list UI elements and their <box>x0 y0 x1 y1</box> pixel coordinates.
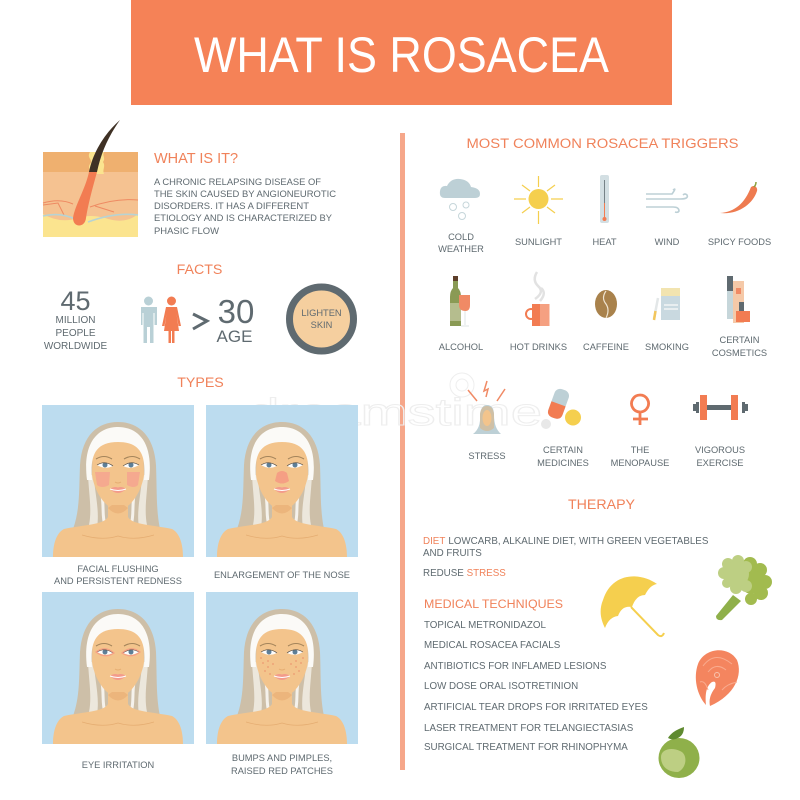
icon: female symbol <box>632 395 649 425</box>
description: THE SKIN CAUSED BY ANGIONEUROTIC <box>154 188 336 199</box>
icon: sun <box>514 176 563 224</box>
fact: lighten skin badge <box>290 287 354 351</box>
trigger: alcohol <box>439 276 483 352</box>
therapy: stress text: REDUSE STRESS <box>423 568 506 579</box>
heading: what is it: WHAT IS IT? <box>154 151 238 167</box>
fact: lighten skin badge: LIGHTEN <box>301 308 342 318</box>
icon: cigarette pack <box>654 288 680 320</box>
panel: enlargement of the nose: ENLARGEMENT OF THE NOSE <box>214 570 350 580</box>
list: medical techniques: TOPICAL METRONIDAZOL <box>424 620 546 631</box>
panel: facial flushing: AND PERSISTENT REDNESS <box>54 576 182 586</box>
fact: 45 million: WORLDWIDE <box>44 341 107 352</box>
trigger: cosmetics: CERTAIN <box>720 335 759 345</box>
fact: 45 million: MILLION <box>55 315 96 326</box>
icon: dumbbell <box>693 395 748 420</box>
centre divider <box>400 133 405 770</box>
icon: pills <box>541 387 581 429</box>
trigger: cold weather: COLD <box>448 232 474 242</box>
description <box>154 176 336 236</box>
fact: age <box>141 293 254 346</box>
trigger: cold weather <box>438 179 484 254</box>
trigger: exercise: EXERCISE <box>696 458 744 468</box>
list: medical techniques: MEDICAL ROSACEA FACIALS <box>424 640 561 651</box>
trigger: wind: WIND <box>655 237 680 247</box>
therapy: diet text: LOWCARB, ALKALINE DIET, WITH GREEN VEGETABLES <box>448 536 709 547</box>
panel: enlargement of the nose <box>206 405 358 580</box>
icon: green apple <box>658 727 700 778</box>
trigger: cold weather: WEATHER <box>438 244 484 254</box>
icon: salmon steak <box>696 650 739 706</box>
trigger: sunlight: SUNLIGHT <box>515 237 562 247</box>
trigger: menopause: THE <box>631 445 649 455</box>
panel: facial flushing <box>42 405 194 586</box>
illustration: flushed face <box>42 405 194 557</box>
panel: bumps and pimples <box>206 592 358 776</box>
trigger: caffeine <box>583 290 629 352</box>
trigger: menopause: MENOPAUSE <box>611 458 669 468</box>
trigger: smoking: SMOKING <box>645 342 689 352</box>
watermark: dreamstime <box>248 392 542 434</box>
trigger: hot drinks <box>510 272 567 352</box>
illustration: enlarged nose face <box>206 405 358 557</box>
icon: steaming mug <box>526 272 550 326</box>
trigger: cosmetics: COSMETICS <box>712 348 767 358</box>
fact: 45 million <box>44 286 107 352</box>
trigger: wind <box>646 189 687 247</box>
trigger: smoking <box>645 288 689 352</box>
heading: facts: FACTS <box>177 262 222 278</box>
trigger: spicy foods <box>708 182 771 247</box>
description: A CHRONIC RELAPSING DISEASE OF <box>154 176 321 187</box>
trigger: heat <box>592 175 617 247</box>
trigger: medicines: MEDICINES <box>537 458 589 468</box>
panel: bumps and pimples: RAISED RED PATCHES <box>231 766 333 776</box>
trigger: caffeine: CAFFEINE <box>583 342 629 352</box>
fact: age: 30 <box>218 293 254 330</box>
heading: therapy: THERAPY <box>568 497 636 513</box>
trigger: sunlight <box>514 176 563 247</box>
panel: facial flushing: FACIAL FLUSHING <box>77 564 159 574</box>
icon: stressed woman <box>468 381 505 434</box>
description: DISORDERS. IT HAS A DIFFERENT <box>154 200 309 211</box>
title banner <box>131 0 672 105</box>
heading: types: TYPES <box>177 375 224 391</box>
trigger: menopause <box>611 395 669 468</box>
trigger: medicines: CERTAIN <box>543 445 583 455</box>
list: medical techniques <box>424 620 648 753</box>
panel: bumps and pimples: BUMPS AND PIMPLES, <box>232 753 332 763</box>
description: ETIOLOGY AND IS CHARACTERIZED BY <box>154 212 333 223</box>
trigger: heat: HEAT <box>592 237 617 247</box>
icon: wind <box>646 189 687 212</box>
list: medical techniques: SURGICAL TREATMENT FOR RHINOPHYMA <box>424 742 628 753</box>
icon: umbrella <box>601 576 664 636</box>
icon: man <box>141 296 157 343</box>
trigger: stress <box>468 381 506 461</box>
trigger: hot drinks: HOT DRINKS <box>510 342 567 352</box>
list: medical techniques: LASER TREATMENT FOR TELANGIECTASIAS <box>424 723 634 734</box>
heading: triggers: MOST COMMON ROSACEA TRIGGERS <box>466 136 738 152</box>
panel: eye irritation <box>42 592 194 770</box>
fact: lighten skin badge: SKIN <box>311 320 332 330</box>
therapy: diet text: AND FRUITS <box>423 548 482 559</box>
watermark <box>248 373 542 434</box>
icon: broccoli <box>716 555 772 620</box>
list: medical techniques: ARTIFICIAL TEAR DROPS FOR IRRITATED EYES <box>424 702 648 713</box>
therapy: diet text: DIET <box>423 536 445 547</box>
icon: thermometer <box>600 175 609 223</box>
list: medical techniques: LOW DOSE ORAL ISOTRETINION <box>424 681 578 692</box>
description: PHASIC FLOW <box>154 225 219 236</box>
icon: cosmetics <box>727 276 750 323</box>
fact: age: AGE <box>217 327 252 346</box>
trigger: alcohol: ALCOHOL <box>439 342 483 352</box>
icon: wine bottle and glass <box>450 276 470 326</box>
trigger: spicy foods: SPICY FOODS <box>708 237 771 247</box>
trigger: medicines <box>537 387 589 468</box>
icon: woman <box>162 296 181 343</box>
illustration: irritated eyes face <box>42 592 194 744</box>
heading: medical techniques: MEDICAL TECHNIQUES <box>424 597 563 611</box>
trigger: cosmetics <box>712 276 767 358</box>
illustration: bumps face <box>206 592 358 744</box>
trigger: stress: STRESS <box>468 451 506 461</box>
panel: eye irritation: EYE IRRITATION <box>82 760 154 770</box>
icon: skin cross-section <box>43 120 138 237</box>
fact: 45 million: PEOPLE <box>55 328 96 339</box>
panel: what is it <box>43 120 336 237</box>
trigger: exercise: VIGOROUS <box>695 445 745 455</box>
title banner: WHAT IS ROSACEA <box>194 27 610 83</box>
icon: chili <box>720 182 757 213</box>
icon: coffee bean <box>595 290 617 318</box>
list: medical techniques: ANTIBIOTICS FOR INFLAMED LESIONS <box>424 661 607 672</box>
icon: snow cloud <box>440 179 480 220</box>
trigger: exercise <box>693 395 748 468</box>
fact: 45 million: 45 <box>60 286 91 316</box>
